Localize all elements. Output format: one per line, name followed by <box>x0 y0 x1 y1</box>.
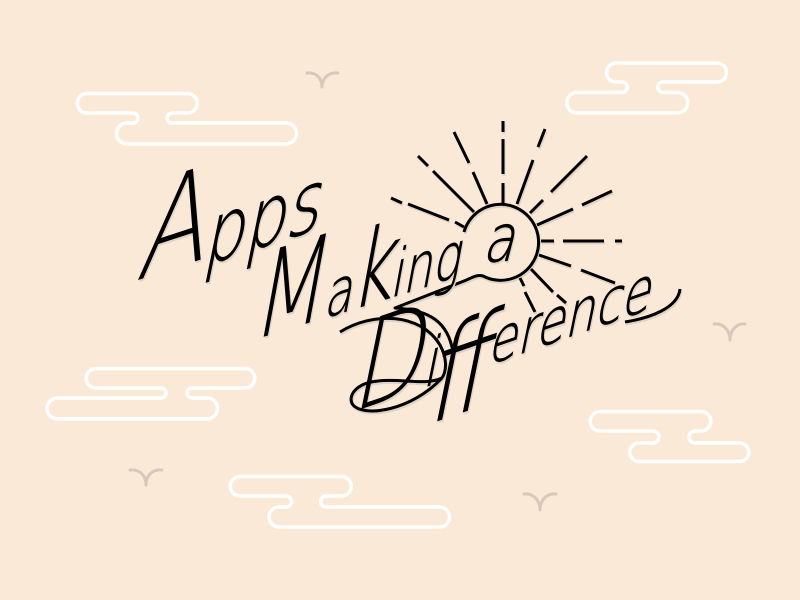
cloud: bottom centre <box>230 476 450 527</box>
cloud: lower right <box>590 412 749 462</box>
flourish: top sweep of D <box>340 318 446 378</box>
word: Difference: f <box>444 283 509 448</box>
icon: bird bottom <box>524 494 556 510</box>
word: Difference: erence <box>484 249 662 381</box>
cloud: lower left <box>47 368 255 419</box>
icon: bird left <box>130 470 162 485</box>
word: a: a <box>478 200 529 278</box>
flourish: end swash <box>625 289 680 322</box>
flourish: lower loop of D <box>351 378 442 411</box>
icon: bird top <box>307 73 338 87</box>
cloud: top left <box>77 94 296 144</box>
word: Making: Making <box>245 163 480 370</box>
title lettering <box>128 95 680 486</box>
icon: bird right <box>714 324 745 340</box>
word: Difference: f <box>418 292 484 457</box>
sun rays <box>391 121 622 312</box>
sun outline with tail flourish <box>395 204 539 352</box>
word: Apps: pps <box>198 147 335 287</box>
word: Difference: Di <box>344 271 449 444</box>
cloud: top right <box>567 63 726 113</box>
sun and rays <box>391 121 622 352</box>
word: Apps: A <box>128 133 230 314</box>
